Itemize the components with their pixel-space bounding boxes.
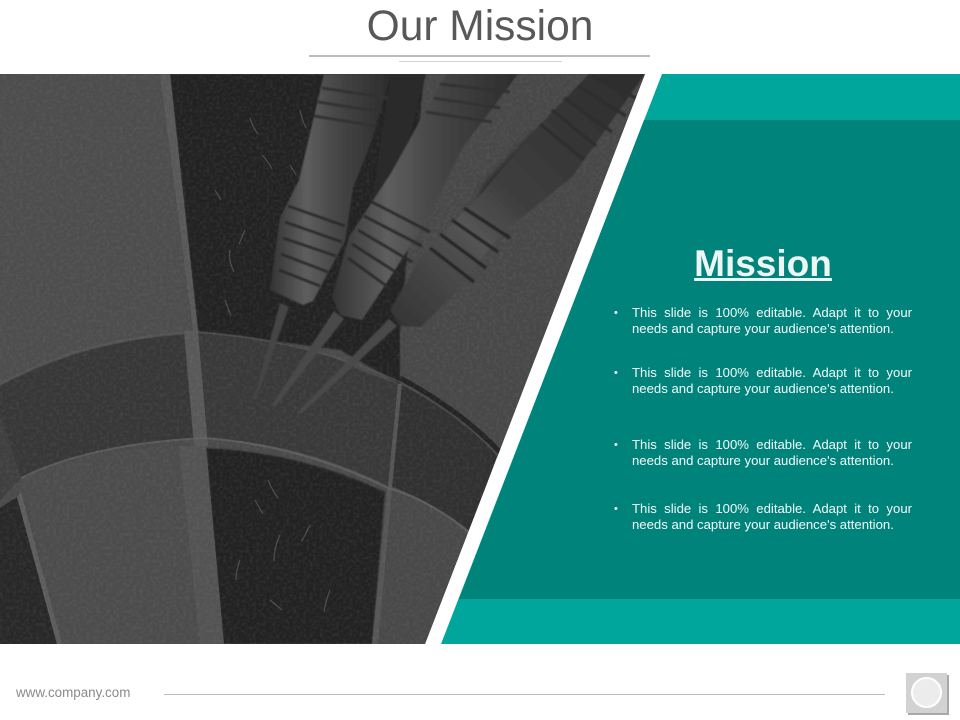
scratches in dark wedges xyxy=(215,110,330,612)
bullet 2: This slide is 100% editable. Adapt it to your xyxy=(632,365,912,380)
left upper tile xyxy=(0,74,192,384)
dart 1 barrel xyxy=(270,74,391,305)
bullet 4: This slide is 100% editable. Adapt it to your xyxy=(632,501,912,516)
right tile xyxy=(497,74,645,458)
bullet 4: • xyxy=(614,503,618,515)
bullet 1: This slide is 100% editable. Adapt it to your xyxy=(632,305,912,320)
ring left band xyxy=(0,334,200,478)
photo: darts in a dartboard xyxy=(0,74,645,644)
title secondary underline xyxy=(399,61,562,62)
bullet 2 xyxy=(614,365,912,396)
dart 3 barrel xyxy=(390,74,645,327)
texture xyxy=(0,74,650,644)
wire strip lower xyxy=(179,446,224,644)
bullet 4 xyxy=(614,501,912,532)
bullet 4: needs and capture your audience's attention. xyxy=(632,517,894,532)
title underline xyxy=(309,55,650,57)
footer line xyxy=(164,694,885,695)
ring right band xyxy=(390,384,497,531)
lower dark wedge xyxy=(206,448,385,644)
lower tiles xyxy=(21,446,200,644)
icon: footer logo xyxy=(906,673,949,715)
bullet 3: needs and capture your audience's attention. xyxy=(632,453,894,468)
dart needles xyxy=(254,303,397,414)
bullet 1: needs and capture your audience's attention. xyxy=(632,321,894,336)
footer website: www.company.com xyxy=(16,685,130,700)
panel: mission heading: Mission xyxy=(694,243,832,284)
title: Our Mission xyxy=(367,3,593,50)
bullet 1: • xyxy=(614,307,618,319)
upper dark wedge xyxy=(170,74,424,384)
bullet 3: • xyxy=(614,439,618,451)
bullet 2: needs and capture your audience's attention. xyxy=(632,381,894,396)
ring centre band xyxy=(198,331,398,486)
dart 2 barrel xyxy=(332,74,518,320)
wire strip upper xyxy=(160,74,198,331)
lower left dark tile xyxy=(0,497,57,644)
ring wires xyxy=(0,332,400,384)
bullet 3: This slide is 100% editable. Adapt it to your xyxy=(632,437,912,452)
dart shadows xyxy=(375,74,426,192)
bullet 2: • xyxy=(614,367,618,379)
bullet 3 xyxy=(614,437,912,468)
bullet 1 xyxy=(614,305,912,336)
